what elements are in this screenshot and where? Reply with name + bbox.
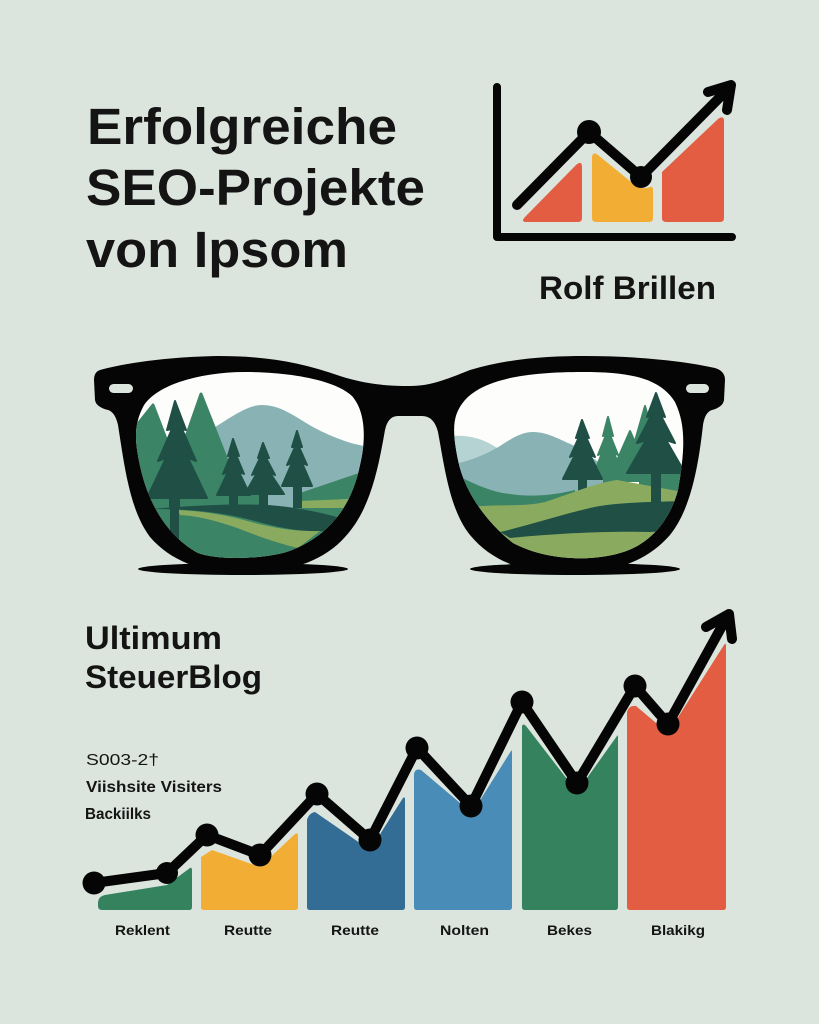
dark small tree	[563, 420, 602, 490]
axis labels: Blakikg	[651, 922, 705, 938]
frame rivets	[109, 384, 709, 393]
axes	[497, 87, 732, 237]
brand label: Rolf Brillen	[539, 270, 716, 306]
bar: red tall	[627, 644, 726, 910]
bar: yellow	[592, 153, 653, 222]
data points	[82, 674, 680, 894]
legend text: S003-2†	[86, 752, 159, 769]
title: von Ipsom	[86, 221, 348, 278]
dark trees	[147, 401, 312, 540]
legend text: Backiilks	[85, 806, 151, 823]
bar: dark blue	[307, 797, 405, 910]
trend line with arrow	[517, 85, 731, 205]
axis labels: Reklent	[115, 922, 170, 938]
title: SEO-Projekte	[86, 159, 425, 216]
title	[86, 98, 425, 278]
section heading	[85, 620, 262, 695]
bar: green small	[98, 868, 192, 910]
bar: red	[662, 117, 724, 222]
glasses frame	[94, 356, 725, 574]
back trees	[136, 392, 228, 492]
bar: green tall	[522, 724, 618, 910]
back trees	[596, 405, 682, 496]
right lens landscape	[454, 372, 684, 558]
bar: yellow	[201, 833, 298, 910]
illustration: glasses	[94, 356, 725, 575]
axis labels: Reutte	[331, 922, 379, 938]
axis labels	[115, 922, 705, 938]
trend line with arrow	[94, 614, 732, 883]
axis labels: Reutte	[224, 922, 272, 938]
data points	[577, 120, 652, 188]
large bar and line chart	[82, 614, 732, 938]
bar: red triangle	[523, 163, 582, 222]
section heading: SteuerBlog	[85, 659, 262, 695]
legend text: Viishsite Visiters	[86, 779, 222, 796]
title: Erfolgreiche	[87, 98, 397, 155]
legend text	[85, 752, 222, 823]
dark large tree	[627, 393, 685, 502]
icon: small growth chart	[497, 85, 732, 237]
shadows under glasses	[138, 563, 680, 575]
bar: light blue	[414, 750, 512, 910]
left lens landscape	[136, 372, 364, 558]
section heading: Ultimum	[85, 620, 222, 656]
axis labels: Bekes	[547, 922, 592, 938]
axis labels: Nolten	[440, 922, 489, 938]
